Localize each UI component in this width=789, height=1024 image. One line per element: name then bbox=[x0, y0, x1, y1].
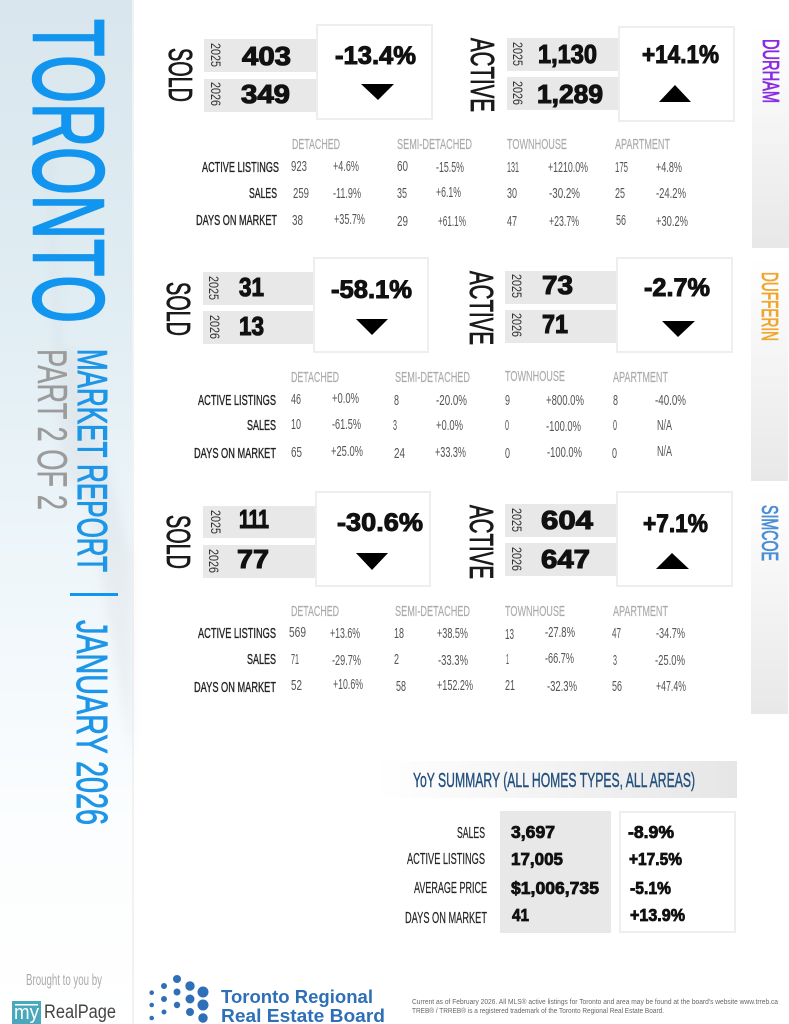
table: Simcoe: -33.3% bbox=[438, 653, 468, 669]
sold bars: 77 bbox=[237, 544, 269, 574]
table: Simcoe: -27.8% bbox=[545, 625, 575, 641]
table: Dufferin: TOWNHOUSE bbox=[505, 368, 565, 385]
sold bars: 349 bbox=[241, 79, 290, 109]
table: Dufferin: +25.0% bbox=[331, 444, 363, 460]
table: Durham: 259 bbox=[293, 186, 309, 202]
active bars: 71 bbox=[542, 309, 568, 339]
table: Simcoe: +38.5% bbox=[437, 626, 468, 642]
sold change box: -30.6% bbox=[337, 509, 423, 537]
logo: myRealPage: my bbox=[14, 1002, 39, 1024]
table: Durham: 60 bbox=[397, 159, 408, 175]
table: Durham: DAYS ON MARKET bbox=[196, 212, 277, 229]
logo: Toronto Regional Real Estate Board bbox=[149, 975, 385, 1024]
sold bars: 2025 bbox=[208, 43, 223, 67]
table: Dufferin: +0.0% bbox=[332, 391, 359, 407]
active bars: 2025 bbox=[509, 508, 524, 532]
summary percent changes bbox=[620, 812, 735, 932]
summary values: 41 bbox=[512, 905, 529, 925]
active bars bbox=[507, 38, 618, 110]
table: Durham bbox=[196, 136, 688, 230]
table: Simcoe: SALES bbox=[247, 651, 276, 668]
table: Durham: +6.1% bbox=[436, 185, 461, 201]
sold bars: 2026 bbox=[206, 549, 221, 573]
table: Simcoe: -32.3% bbox=[547, 679, 577, 695]
table: Simcoe: +47.4% bbox=[656, 679, 686, 695]
table: Dufferin: 0 bbox=[505, 418, 509, 434]
summary values: $1,006,735 bbox=[511, 878, 599, 898]
table: Dufferin: +800.0% bbox=[546, 393, 584, 409]
active bars: 2025 bbox=[510, 42, 525, 66]
table: Durham: SEMI-DETACHED bbox=[397, 136, 472, 153]
active bars: 2026 bbox=[509, 547, 524, 571]
table: Dufferin bbox=[194, 368, 686, 462]
summary row labels: AVERAGE PRICE bbox=[414, 880, 487, 897]
subtitle: part 2 of 2: PART 2 OF 2 bbox=[29, 349, 76, 510]
panel: YoY summary bbox=[377, 761, 737, 933]
sold bars: 2025 bbox=[208, 510, 223, 534]
summary row labels: ACTIVE LISTINGS bbox=[407, 851, 485, 868]
sold bars bbox=[203, 272, 314, 344]
active change box bbox=[617, 258, 732, 352]
table: Durham: -30.2% bbox=[549, 186, 580, 202]
active label: ACTIVE bbox=[463, 271, 500, 345]
panel: sidebar background with faint tower bbox=[0, 0, 134, 1024]
table: Dufferin: 9 bbox=[505, 393, 510, 409]
region tab: Dufferin bbox=[751, 256, 788, 481]
table: Dufferin: -100.0% bbox=[546, 419, 581, 435]
active change box: +7.1% bbox=[643, 510, 708, 538]
table: Simcoe: ACTIVE LISTINGS bbox=[198, 625, 276, 642]
table: Durham: 56 bbox=[616, 213, 626, 229]
sold change box bbox=[317, 25, 432, 119]
title: Toronto: TORONTO bbox=[12, 19, 124, 323]
table: Durham: 47 bbox=[507, 214, 517, 230]
table: Simcoe: 52 bbox=[291, 678, 302, 694]
table: Simcoe: -29.7% bbox=[332, 653, 361, 669]
table: Durham: +23.7% bbox=[549, 214, 579, 230]
active bars: 2026 bbox=[509, 313, 524, 337]
table: Simcoe: 58 bbox=[396, 679, 406, 695]
region tab: Durham bbox=[752, 24, 789, 248]
table: Simcoe bbox=[194, 603, 686, 696]
logo: myRealPage bbox=[12, 1001, 116, 1024]
sold label: SOLD bbox=[160, 515, 197, 569]
table: Simcoe: APARTMENT bbox=[613, 603, 668, 620]
table: Durham: 38 bbox=[292, 213, 303, 229]
table: Simcoe: 3 bbox=[613, 653, 617, 669]
table: Dufferin: DETACHED bbox=[291, 369, 339, 386]
table: Simcoe: 1 bbox=[506, 652, 509, 668]
table: Dufferin: APARTMENT bbox=[613, 369, 668, 386]
section: Simcoe bbox=[160, 490, 788, 714]
table: Simcoe: DETACHED bbox=[291, 603, 339, 620]
active bars: 1,130 bbox=[538, 39, 597, 69]
table: Durham: -24.2% bbox=[656, 186, 686, 202]
divider bar bbox=[70, 593, 118, 596]
table: Simcoe: 18 bbox=[394, 626, 404, 642]
active change box: -2.7% bbox=[644, 274, 710, 302]
table: Durham: +61.1% bbox=[438, 214, 466, 230]
sold change box bbox=[316, 492, 430, 586]
active change box: +14.1% bbox=[642, 41, 719, 69]
table: Dufferin: ACTIVE LISTINGS bbox=[198, 392, 276, 409]
table: Durham: +30.2% bbox=[656, 214, 688, 230]
table: Simcoe: +13.6% bbox=[330, 626, 360, 642]
region tab: Simcoe bbox=[751, 490, 788, 714]
table: Dufferin: 10 bbox=[291, 417, 301, 433]
table: Simcoe: SEMI-DETACHED bbox=[395, 603, 470, 620]
active bars: 1,289 bbox=[537, 79, 603, 109]
table: Durham: -15.5% bbox=[436, 160, 464, 176]
sold bars: 2025 bbox=[206, 276, 221, 300]
sold bars: 2026 bbox=[207, 315, 222, 339]
table: Dufferin: -20.0% bbox=[436, 393, 467, 409]
section: Dufferin bbox=[160, 256, 788, 481]
table: Dufferin: SALES bbox=[247, 417, 276, 434]
summary row labels bbox=[405, 825, 487, 927]
table: Simcoe: 71 bbox=[291, 652, 299, 668]
footer disclaimer text: Current as of February 2026. All MLS® active listings for Toronto and area may be found at the board's website www.trreb.ca bbox=[412, 998, 778, 1006]
summary percent changes: -8.9% bbox=[628, 822, 674, 842]
sold bars: 31 bbox=[239, 272, 264, 302]
summary percent changes: -5.1% bbox=[630, 878, 671, 898]
region tab: Durham: DURHAM bbox=[758, 39, 784, 103]
table: Dufferin: 24 bbox=[394, 446, 405, 462]
table: Dufferin: SEMI-DETACHED bbox=[395, 369, 470, 386]
active bars: 73 bbox=[542, 270, 573, 300]
table: Dufferin: 0 bbox=[505, 446, 510, 462]
active bars bbox=[505, 270, 617, 343]
subtitle: january 2026: JANUARY 2026 bbox=[67, 620, 116, 825]
summary heading bbox=[377, 761, 737, 798]
region tab: Simcoe: SIMCOE bbox=[757, 505, 783, 561]
sold label: SOLD bbox=[162, 48, 199, 102]
logo: myRealPage: RealPage bbox=[44, 1002, 116, 1023]
table: Dufferin: N/A bbox=[657, 444, 672, 460]
table: Dufferin: +33.3% bbox=[435, 445, 466, 461]
table: Durham: TOWNHOUSE bbox=[507, 136, 567, 153]
table: Durham: SALES bbox=[249, 185, 277, 202]
summary percent changes: +13.9% bbox=[630, 905, 685, 925]
summary values: 3,697 bbox=[511, 822, 555, 842]
sold bars bbox=[203, 504, 315, 578]
sold bars: 13 bbox=[239, 311, 264, 341]
logo: Toronto Regional Real Estate Board: Toronto Regional bbox=[221, 987, 373, 1007]
section: Durham bbox=[162, 24, 789, 248]
table: Dufferin: +0.0% bbox=[436, 418, 463, 434]
table: Dufferin: DAYS ON MARKET bbox=[194, 445, 276, 462]
sold bars: 403 bbox=[242, 41, 291, 71]
table: Dufferin: 46 bbox=[291, 392, 301, 408]
table: Simcoe: 56 bbox=[612, 679, 622, 695]
table: Durham: ACTIVE LISTINGS bbox=[202, 159, 279, 176]
active bars: 647 bbox=[541, 544, 590, 574]
table: Durham: +4.8% bbox=[656, 160, 682, 176]
active change box bbox=[617, 492, 732, 586]
table: Durham: APARTMENT bbox=[615, 136, 670, 153]
table: Durham: -11.9% bbox=[333, 186, 361, 202]
active change box bbox=[619, 27, 734, 121]
sold bars: 2026 bbox=[208, 82, 223, 106]
table: Durham: 131 bbox=[507, 160, 519, 176]
summary values: 17,005 bbox=[511, 849, 563, 869]
footer disclaimer text: TREB® / TRREB® is a registered trademark of the Toronto Regional Real Estate Board. bbox=[412, 1007, 664, 1015]
table: Simcoe: 13 bbox=[505, 627, 514, 643]
table: Simcoe: -34.7% bbox=[656, 626, 685, 642]
sold bars: 111 bbox=[239, 504, 269, 534]
summary row labels: SALES bbox=[457, 825, 485, 842]
active bars: 604 bbox=[541, 505, 594, 535]
sold label: SOLD bbox=[160, 282, 197, 336]
summary values bbox=[500, 811, 611, 933]
active label: ACTIVE bbox=[463, 505, 500, 579]
table: Durham: +1210.0% bbox=[548, 160, 588, 176]
table: Dufferin: 0 bbox=[612, 446, 617, 462]
sold bars bbox=[204, 39, 316, 112]
subtitle: market report: MARKET REPORT bbox=[69, 349, 116, 572]
table: Dufferin: 0 bbox=[613, 418, 617, 434]
table: Simcoe: -25.0% bbox=[655, 653, 685, 669]
active bars: 2025 bbox=[509, 274, 524, 298]
active bars: 2026 bbox=[510, 81, 525, 105]
table: Dufferin: -100.0% bbox=[547, 445, 582, 461]
sold change box bbox=[314, 258, 428, 352]
table: Dufferin: 8 bbox=[613, 393, 618, 409]
active bars bbox=[505, 504, 617, 576]
table: Dufferin: N/A bbox=[657, 418, 672, 434]
table: Simcoe: +152.2% bbox=[437, 678, 473, 694]
table: Durham: +35.7% bbox=[334, 212, 365, 228]
table: Dufferin: 65 bbox=[291, 445, 302, 461]
table: Durham: 35 bbox=[397, 186, 407, 202]
table: Durham: 175 bbox=[615, 160, 628, 176]
table: Simcoe: DAYS ON MARKET bbox=[194, 679, 276, 696]
table: Simcoe: 2 bbox=[394, 652, 399, 668]
table: Simcoe: TOWNHOUSE bbox=[505, 603, 565, 620]
sold change box: -13.4% bbox=[335, 42, 416, 70]
table: Dufferin: 3 bbox=[393, 418, 397, 434]
table: Durham: +4.6% bbox=[333, 159, 359, 175]
table: Durham: 30 bbox=[507, 186, 517, 202]
table: Simcoe: 569 bbox=[289, 625, 306, 641]
active label: ACTIVE bbox=[464, 38, 501, 112]
summary row labels: DAYS ON MARKET bbox=[405, 910, 487, 927]
table: Durham: 923 bbox=[291, 159, 307, 175]
brought to you by text: Brought to you by bbox=[26, 972, 102, 989]
sold change box: -58.1% bbox=[331, 276, 412, 304]
region tab: Dufferin: DUFFERIN bbox=[757, 272, 783, 341]
table: Dufferin: -40.0% bbox=[655, 393, 686, 409]
table: Durham: 25 bbox=[615, 186, 625, 202]
table: Dufferin: -61.5% bbox=[332, 417, 361, 433]
table: Simcoe: 47 bbox=[612, 626, 621, 642]
table: Durham: 29 bbox=[397, 214, 408, 230]
table: Simcoe: +10.6% bbox=[333, 677, 363, 693]
table: Dufferin: 8 bbox=[394, 393, 399, 409]
table: Simcoe: -66.7% bbox=[545, 651, 574, 667]
table: Durham: DETACHED bbox=[292, 136, 340, 153]
table: Simcoe: 21 bbox=[505, 678, 515, 694]
footer disclaimer text bbox=[412, 998, 778, 1015]
summary percent changes: +17.5% bbox=[629, 849, 682, 869]
